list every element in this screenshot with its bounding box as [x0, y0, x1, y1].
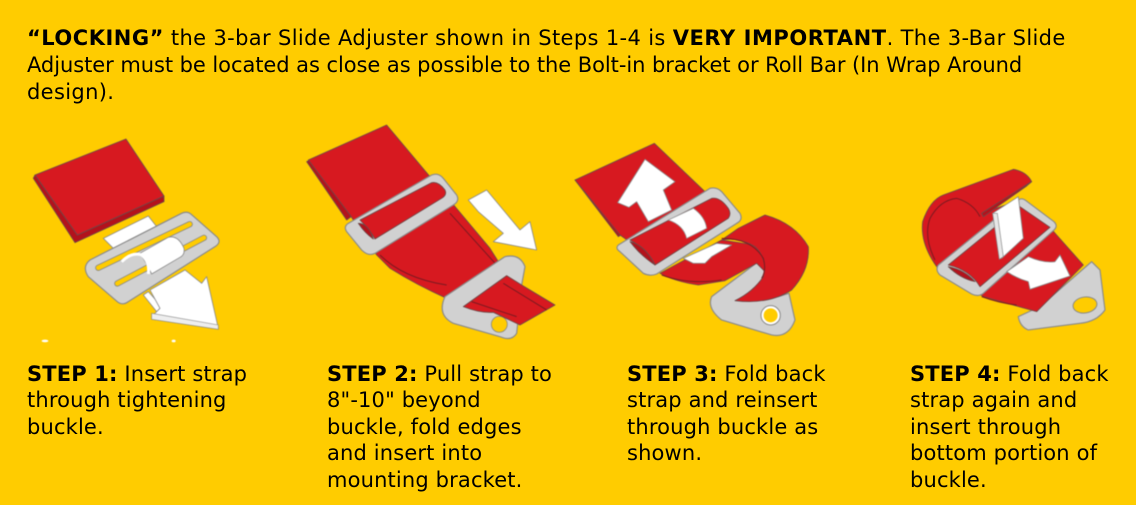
step 2 text: mounting bracket. [327, 468, 522, 492]
step 3 text: STEP 3: Fold back [627, 362, 826, 386]
step 4 text: buckle. [910, 468, 987, 492]
step 1 text: through tightening [27, 388, 227, 412]
step 3 text [627, 362, 826, 465]
intro text: design). [27, 80, 114, 104]
step 2 text [327, 362, 552, 492]
step 1 text [27, 362, 247, 438]
step 4 text: bottom portion of [910, 441, 1097, 465]
step 2 text: and insert into [327, 441, 482, 465]
step 3 text: strap and reinsert [627, 388, 818, 412]
step 4 text: strap again and [910, 388, 1077, 412]
icon: step 3 strap and buckle [575, 143, 808, 335]
step 3 text: shown. [627, 441, 702, 465]
icon: step 1 strap and buckle [33, 139, 219, 342]
icon: step 4 strap and buckle [922, 169, 1105, 330]
step 1 text: STEP 1: Insert strap [27, 362, 247, 386]
step 4 text [910, 362, 1109, 492]
step 2 text: buckle, fold edges [327, 414, 522, 438]
intro text: Adjuster must be located as close as possible to the Bolt-in bracket or Roll Bar (In Wrap Around [27, 53, 1022, 77]
step 3 text: through buckle as [627, 414, 818, 438]
icon: step 2 strap and buckle [307, 125, 555, 339]
step 1 text: buckle. [27, 414, 104, 438]
step 4 text: insert through [910, 414, 1061, 438]
intro text [27, 26, 1066, 104]
step 4 text: STEP 4: Fold back [910, 362, 1109, 386]
step 2 text: 8"-10" beyond [327, 388, 481, 412]
intro text: “LOCKING” the 3-bar Slide Adjuster shown in Steps 1-4 is VERY IMPORTANT. The 3-Bar Slide [27, 26, 1066, 50]
step 2 text: STEP 2: Pull strap to [327, 362, 552, 386]
